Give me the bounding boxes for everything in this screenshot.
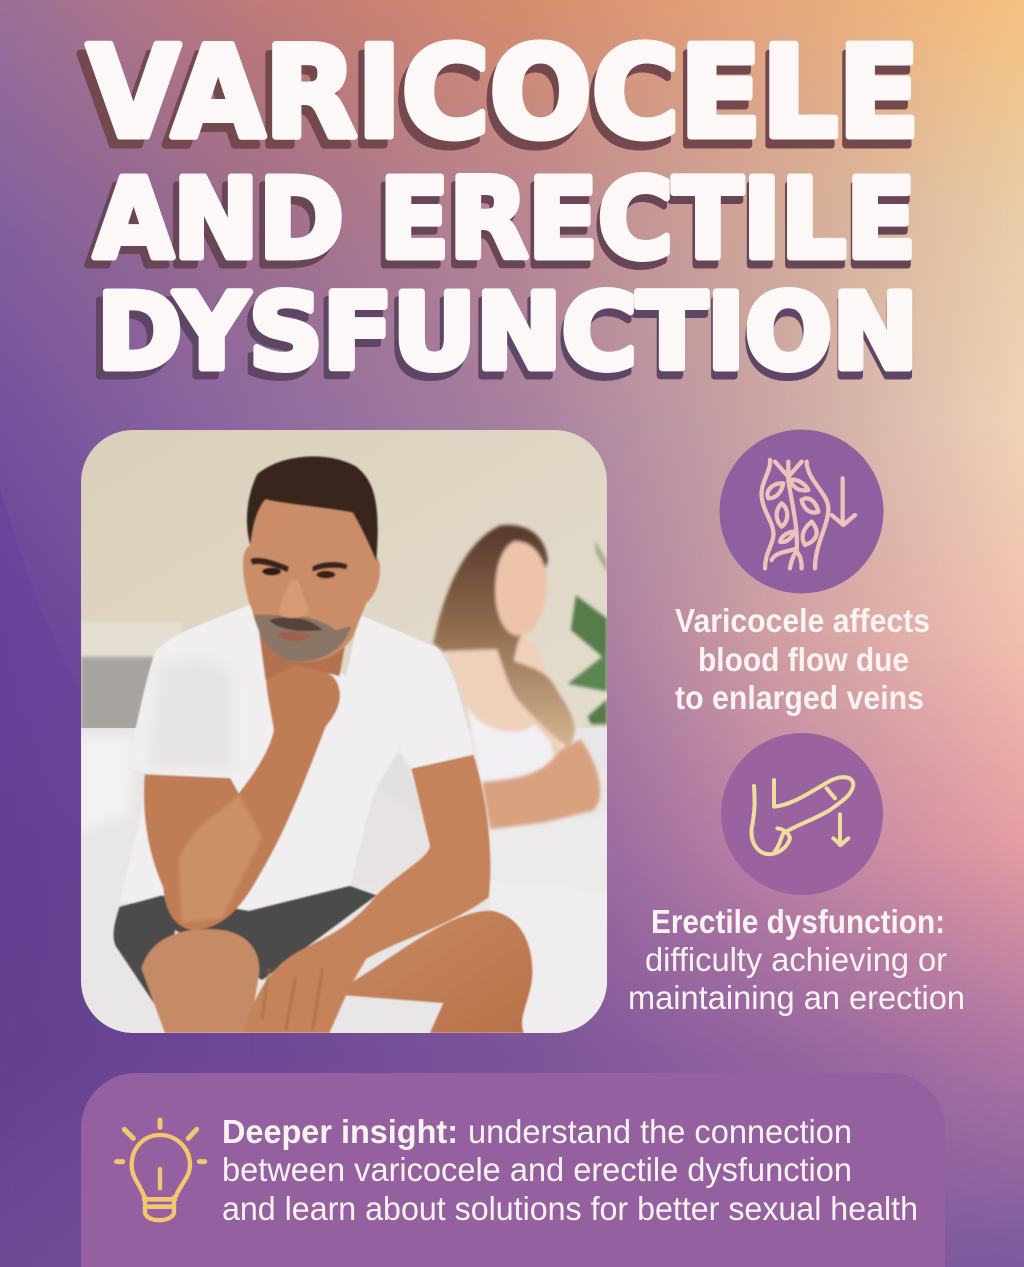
neck xyxy=(258,630,346,680)
insight text: between varicocele and erectile dysfunction xyxy=(222,1151,852,1188)
text: varicocele affects blood flow: blood flow due xyxy=(698,641,909,678)
shorts xyxy=(114,886,376,1015)
right arm and hand xyxy=(244,755,490,1033)
insight text: Deeper insight: xyxy=(222,1113,458,1150)
nose xyxy=(280,580,309,618)
insight text: and learn about solutions for better sexual health xyxy=(222,1190,918,1227)
man xyxy=(114,456,532,1033)
insight text: understand the connection xyxy=(468,1113,852,1150)
title xyxy=(79,19,920,401)
text: varicocele affects blood flow xyxy=(675,602,930,716)
title line 1: VARICOCELE xyxy=(79,28,917,175)
text: varicocele affects blood flow: Varicocele affects xyxy=(675,602,930,639)
text: erectile dysfunction definition: difficulty achieving or xyxy=(645,941,947,978)
wall and bed xyxy=(81,430,607,1033)
icon: light bulb xyxy=(117,1120,205,1220)
shirt xyxy=(120,605,474,913)
panel: deeper insight xyxy=(81,1073,945,1267)
title line 3: DYSFUNCTION xyxy=(90,279,918,401)
text: erectile dysfunction definition: maintaining an erection xyxy=(628,979,965,1016)
title line 2: AND ERECTILE xyxy=(94,155,916,283)
thigh legs xyxy=(141,929,259,1033)
insight text xyxy=(222,1113,918,1227)
hair xyxy=(247,456,378,561)
title line 1: VARICOCELE xyxy=(87,19,920,166)
title line 3: DYSFUNCTION xyxy=(97,271,918,393)
face xyxy=(243,495,380,662)
right hand knuckles shadow xyxy=(262,968,323,1030)
text: varicocele affects blood flow: to enlarged veins xyxy=(675,679,924,716)
plant xyxy=(567,540,607,724)
photo: man and woman sitting on a bed xyxy=(81,430,607,1033)
text: erectile dysfunction definition: Erectile dysfunction: xyxy=(651,903,945,940)
eyes and brows xyxy=(250,558,289,572)
icon: veins in purple circle xyxy=(720,430,884,594)
text: erectile dysfunction definition xyxy=(628,903,965,1016)
title line 2: AND ERECTILE xyxy=(87,163,915,291)
icon: erection with down arrow in purple circle xyxy=(721,733,883,895)
beard xyxy=(254,615,351,661)
left arm and fist xyxy=(144,661,340,930)
woman xyxy=(432,522,602,831)
